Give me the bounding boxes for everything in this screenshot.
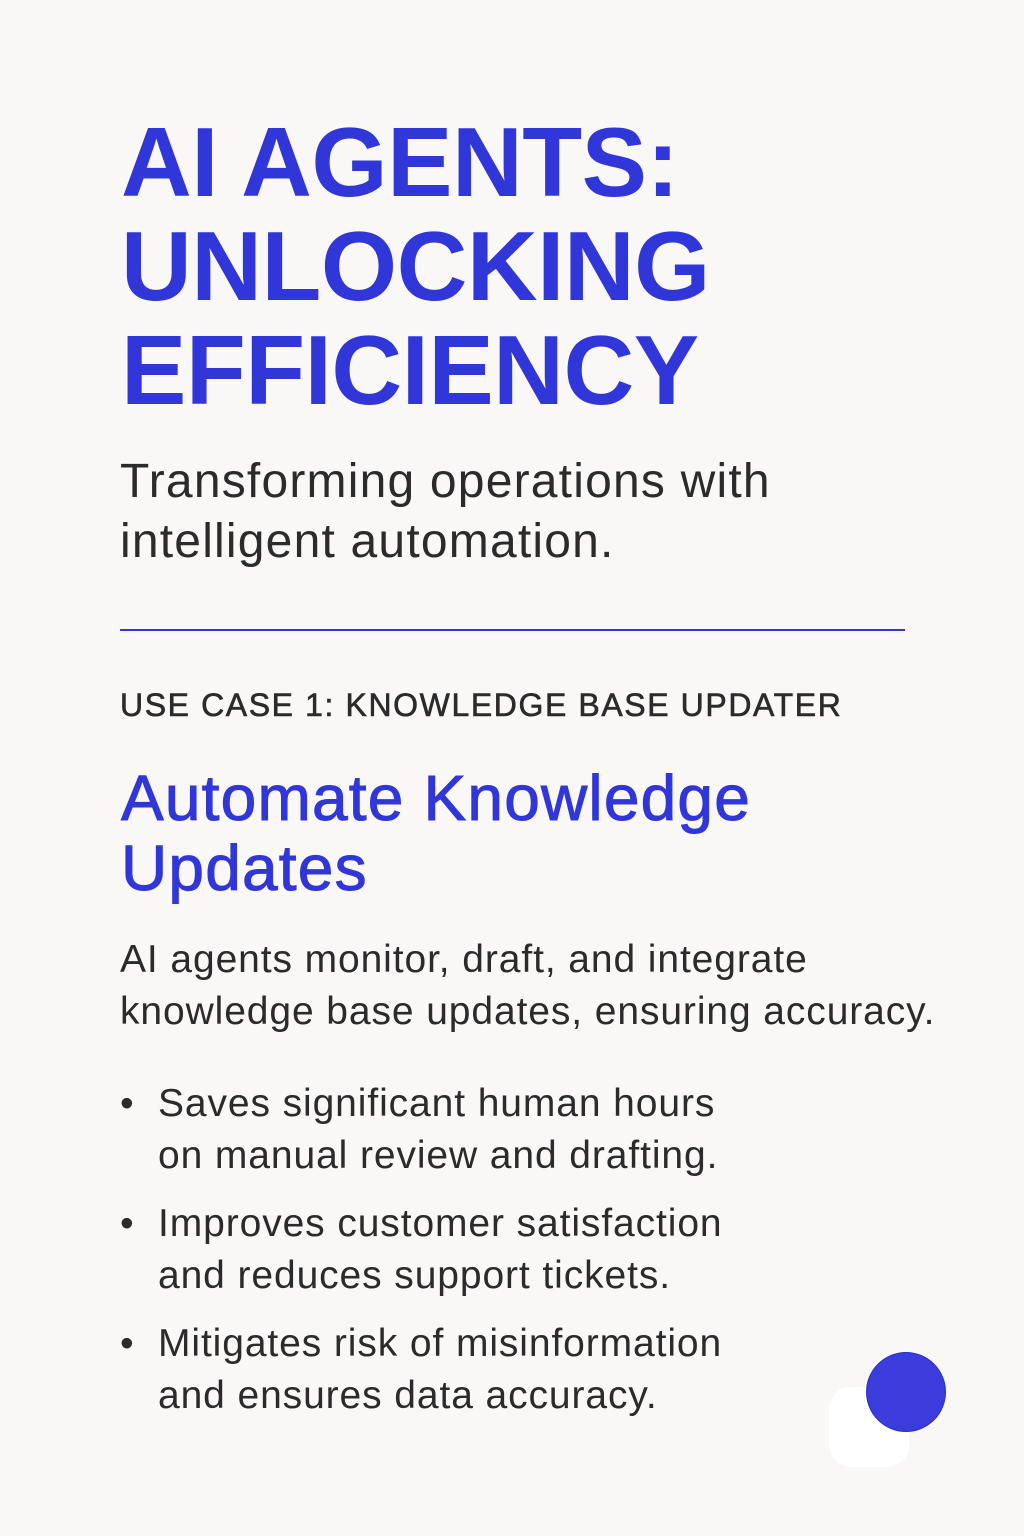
heading <box>120 762 751 904</box>
description: knowledge base updates, ensuring accuracy. <box>120 990 935 1033</box>
bullet 1: Saves significant human hours <box>158 1082 715 1125</box>
title: UNLOCKING <box>121 211 710 321</box>
bullet 1 <box>120 1082 718 1177</box>
heading: Updates <box>121 832 368 904</box>
description <box>120 938 935 1033</box>
heading: Automate Knowledge <box>121 762 751 834</box>
bullet 2: and reduces support tickets. <box>158 1254 671 1297</box>
title: AI AGENTS: <box>121 107 679 217</box>
description: AI agents monitor, draft, and integrate <box>120 938 808 981</box>
subtitle: Transforming operations with <box>120 455 771 508</box>
title: EFFICIENCY <box>121 315 699 425</box>
bullet 2 <box>120 1202 723 1297</box>
divider line <box>120 629 905 631</box>
bullet 3: and ensures data accuracy. <box>158 1374 658 1417</box>
use case label: USE CASE 1: KNOWLEDGE BASE UPDATER <box>120 687 842 723</box>
title <box>121 107 710 425</box>
bullet list <box>120 1082 723 1417</box>
bullet 1: • <box>120 1082 135 1125</box>
bullet 2: • <box>120 1202 135 1245</box>
subtitle <box>120 455 771 568</box>
bullet 2: Improves customer satisfaction <box>158 1202 723 1245</box>
bullet 3 <box>120 1322 722 1417</box>
decorative shapes <box>866 1352 946 1432</box>
bullet 3: • <box>120 1322 135 1365</box>
bullet 3: Mitigates risk of misinformation <box>158 1322 722 1365</box>
subtitle: intelligent automation. <box>120 515 615 568</box>
bullet 1: on manual review and drafting. <box>158 1134 718 1177</box>
